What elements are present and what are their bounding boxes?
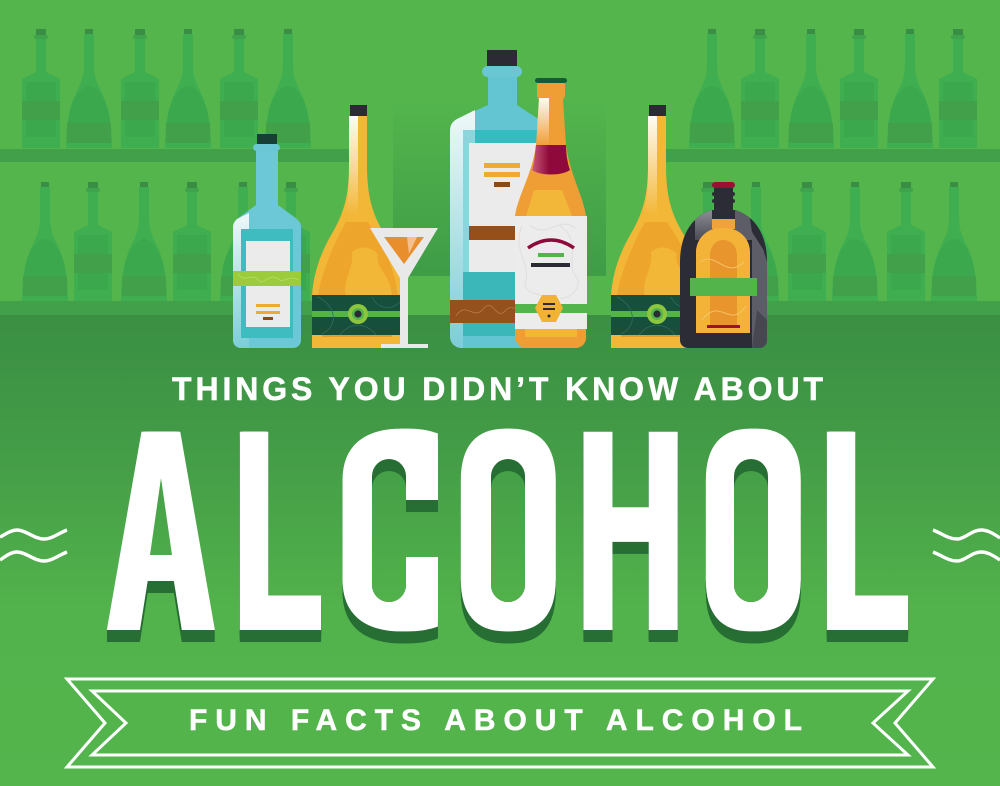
- background bottles: lower left: [22, 182, 310, 301]
- banner text: FUN FACTS ABOUT ALCOHOL: [189, 704, 802, 737]
- ribbon banner: [67, 679, 933, 767]
- bottle: champagne: [515, 78, 587, 348]
- shelf: upper right: [655, 149, 1000, 162]
- bottle: amber left: [312, 105, 404, 348]
- floor background: [0, 315, 1000, 786]
- counter of C: [372, 459, 442, 602]
- label: [515, 216, 587, 329]
- title: ALCOHOL: A: [104, 379, 210, 695]
- bottle: amber right: [611, 105, 703, 348]
- martini glass: [370, 228, 438, 348]
- bottle: small teal: [233, 134, 301, 348]
- counter of second O: [734, 459, 768, 602]
- title: ALCOHOL: H: [570, 379, 691, 695]
- shelf: upper left: [0, 149, 355, 162]
- shelf: lower left: [0, 301, 350, 315]
- counter of first O: [491, 459, 525, 602]
- bottle: large teal: [450, 50, 540, 348]
- wave ornament left: [0, 530, 67, 561]
- counter of A: [150, 478, 172, 555]
- title: ALCOHOL: O: [453, 404, 558, 562]
- background bottles: upper left: [22, 29, 311, 148]
- bottle: dark liqueur: [680, 182, 770, 348]
- shelf: lower right: [650, 301, 1000, 315]
- label: [246, 241, 290, 327]
- background bottles: lower right: [689, 182, 977, 301]
- lower band: [450, 300, 520, 323]
- centre wall panel: [393, 100, 606, 276]
- title: ALCOHOL: L: [808, 379, 911, 695]
- title: ALCOHOL: C: [328, 404, 446, 562]
- bottle label: [712, 219, 735, 229]
- background bottles: upper right: [689, 29, 977, 148]
- title: ALCOHOL: O: [698, 404, 803, 562]
- title: ALCOHOL: L: [221, 379, 324, 695]
- heading: things you didn't know about: THINGS YOU DIDN’T KNOW ABOUT: [172, 371, 823, 407]
- label: [469, 143, 540, 272]
- wave ornament right: [933, 530, 1000, 561]
